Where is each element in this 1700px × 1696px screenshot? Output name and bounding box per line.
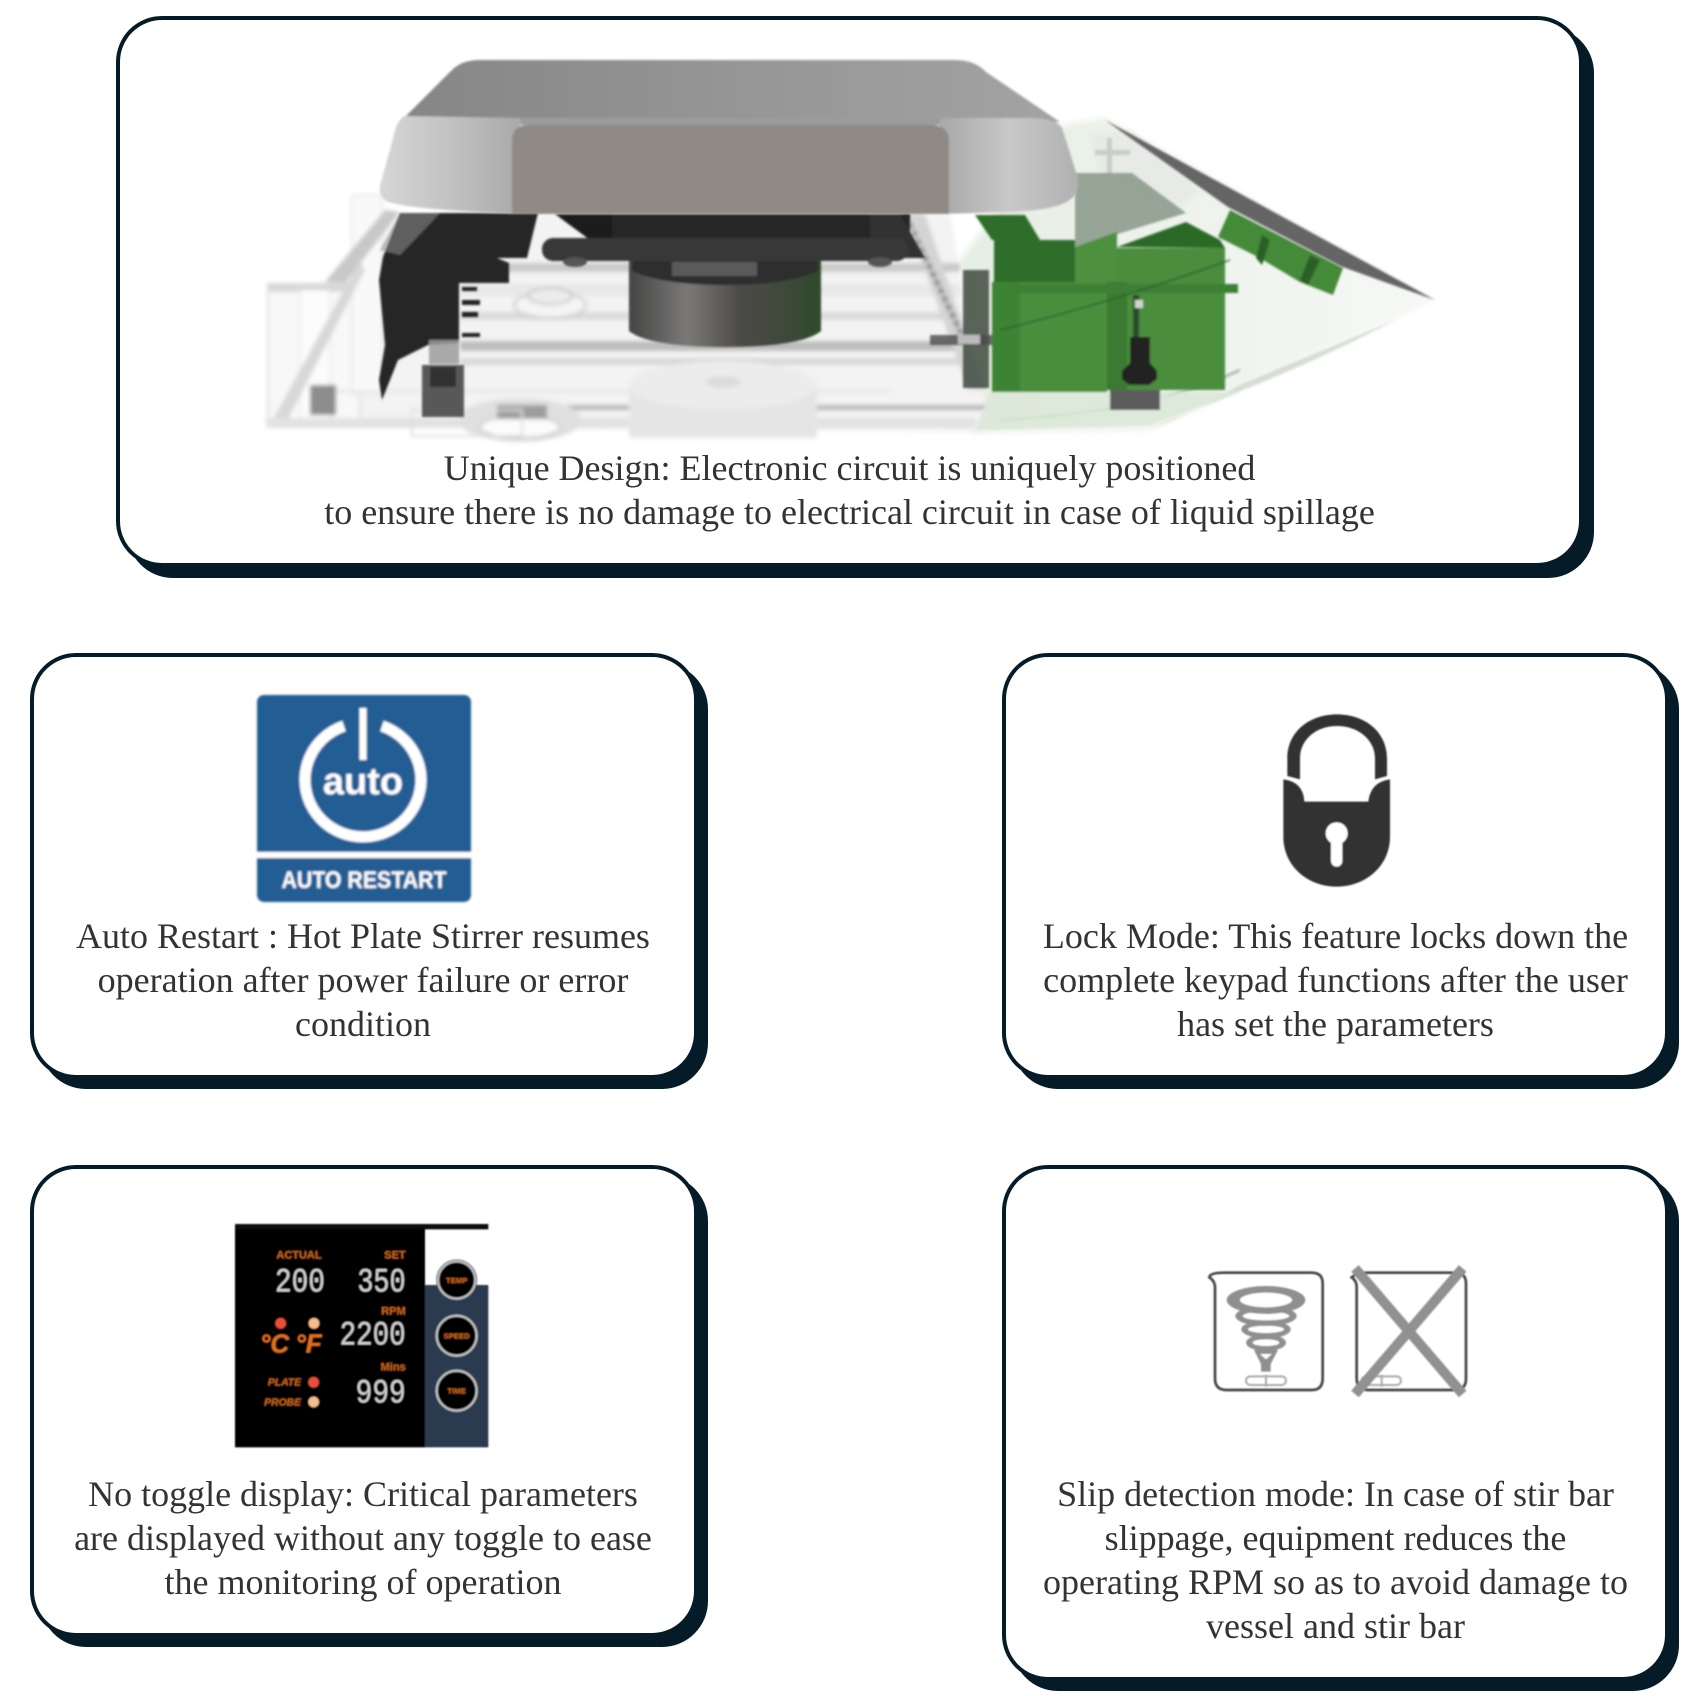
icon: padlock [1282,713,1392,888]
icon: control panel display: PLATE [268,1378,302,1389]
caption: auto restart: Auto Restart : Hot Plate Stirrer resumes [76,916,650,956]
panel: unique design [116,16,1583,567]
caption: auto restart: operation after power failure or error [98,960,628,1000]
caption: auto restart: condition [295,1004,431,1044]
caption: lock mode: Lock Mode: This feature locks down the [1043,916,1628,956]
icon: vortex beaker [1209,1273,1323,1390]
icon: auto restart badge [255,693,473,904]
illustration: hot plate stirrer cutaway [265,58,1434,444]
icon: auto restart badge: AUTO RESTART [282,867,447,894]
circuit: green electronics block [930,173,1343,430]
icon: crossed-out beaker [1352,1268,1466,1394]
hot plate: top surface and housing [380,60,1078,214]
icon: control panel display: 200 [275,1263,325,1302]
caption: no toggle display: the monitoring of operation [165,1562,561,1602]
icon: auto restart badge: auto [323,761,403,803]
icon: control panel display: PROBE [264,1397,302,1408]
icon: control panel display: ACTUAL [276,1249,322,1261]
icon: control panel display: TIME [448,1386,466,1395]
panel: no toggle display [30,1165,698,1637]
caption: lock mode: has set the parameters [1177,1004,1494,1044]
icon: control panel display: °F [295,1329,323,1359]
caption: unique design [324,448,1375,532]
caption: unique design: Unique Design: Electronic circuit is uniquely positioned [444,448,1255,488]
icon: control panel display: SET [384,1249,406,1261]
caption: slip detection mode: Slip detection mode: In case of stir bar [1057,1474,1614,1514]
caption: no toggle display: No toggle display: Critical parameters [88,1474,638,1514]
panel: lock mode [1002,653,1669,1079]
shell: translucent right housing [960,118,1435,432]
display panel: angled dark sliver [1105,120,1435,300]
icon: control panel display: RPM [381,1305,406,1317]
caption: slip detection mode: operating RPM so as to avoid damage to [1043,1562,1628,1602]
caption: no toggle display: are displayed without any toggle to ease [74,1518,652,1558]
caption: unique design: to ensure there is no damage to electrical circuit in case of liquid spillage [324,492,1375,532]
icon: control panel display: TEMP [446,1276,467,1285]
icon: control panel display: Mins [381,1361,406,1373]
icon: control panel display [234,1222,490,1448]
base: transparent body with bands [266,195,990,442]
icon: control panel display: SPEED [444,1331,470,1340]
assembly: stirring plate and motor [542,214,925,347]
icon: beakers with vortex and crossed stir bar [1207,1264,1468,1398]
panel: auto restart [30,653,698,1079]
caption: lock mode: complete keypad functions after the user [1043,960,1628,1000]
icon: control panel display: 2200 [340,1317,406,1356]
icon: control panel display: 999 [356,1374,406,1413]
caption: slip detection mode: vessel and stir bar [1206,1606,1465,1646]
panel: slip detection mode [1002,1165,1669,1681]
caption: auto restart [76,916,650,1044]
caption: no toggle display [74,1474,652,1602]
caption: slip detection mode: slippage, equipment reduces the [1105,1518,1566,1558]
caption: slip detection mode [1043,1474,1628,1646]
caption: lock mode [1043,916,1628,1044]
assembly: dark left-side electronics [379,213,538,417]
icon: control panel display: °C [260,1329,290,1359]
icon: control panel display: 350 [357,1263,406,1302]
